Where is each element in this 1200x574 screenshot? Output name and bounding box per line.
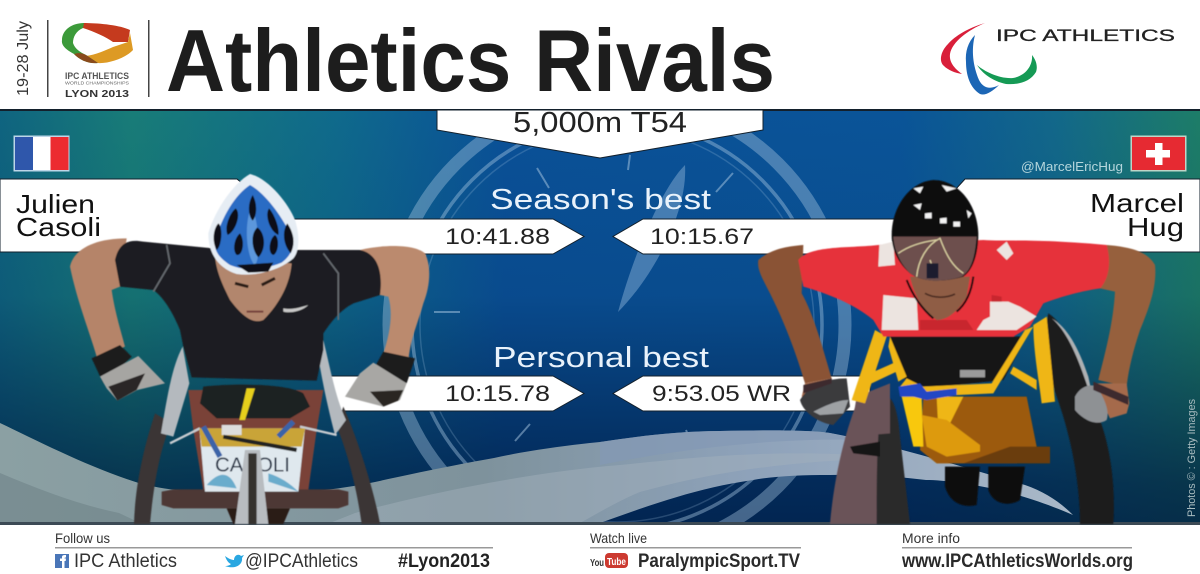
chair body: [920, 397, 1037, 463]
Switzerland flag: [1130, 136, 1186, 172]
athlete: Julien Casoli: [70, 174, 429, 524]
axle: [162, 489, 348, 508]
name panel: Hug: Marcel: [1090, 188, 1184, 218]
face: [215, 257, 292, 321]
arms: [70, 238, 127, 357]
photo credit: Photos © : Getty Images: [1186, 399, 1198, 517]
time bar: Hug season: [613, 219, 905, 254]
time bar: Casoli personal: [330, 376, 584, 411]
time bar: Casoli season: 10:41.88: [445, 224, 550, 249]
footer: follow us: #Lyon2013: [398, 551, 490, 572]
time bar: Hug personal: 9:53.05 WR: [652, 381, 791, 406]
name panel: Casoli: Julien: [16, 189, 95, 219]
name panel: Casoli: [0, 179, 243, 252]
shirt: [115, 241, 381, 381]
season heading: Season's best: [490, 184, 711, 216]
time bar: Hug personal: [613, 376, 870, 411]
athlete: Marcel Hug: [758, 180, 1155, 524]
IPC Athletics logo: IPC ATHLETICS: [996, 27, 1175, 45]
footer white strip: [0, 525, 1200, 574]
divider right: [148, 20, 150, 97]
time bar: Casoli personal: 10:15.78: [445, 381, 550, 406]
divider left: [47, 20, 48, 97]
header white strip: [0, 0, 1200, 110]
helmet: [892, 180, 978, 281]
seat: [890, 337, 1027, 388]
feet: [945, 467, 1025, 506]
footer: watch live: ParalympicSport.TV: [638, 551, 800, 572]
gloves: [92, 345, 415, 383]
wheels: [1046, 313, 1114, 524]
icon: YouTube: You: [590, 558, 604, 569]
footer: follow us: IPC Athletics: [74, 551, 177, 572]
Lyon 2013 logo: [62, 23, 133, 100]
Lyon 2013 logo: WORLD CHAMPIONSHIPS: [65, 80, 129, 86]
time bar: Casoli season: [290, 219, 584, 254]
bottom rule: [0, 522, 1200, 525]
swoosh: [0, 423, 1073, 523]
gloves: [800, 378, 850, 425]
front fork: [235, 450, 268, 524]
name panel: Casoli: Casoli: [16, 212, 101, 242]
icon: facebook: [55, 554, 69, 568]
helmet: [208, 174, 298, 275]
event tab: [437, 107, 763, 158]
date: 19-28 July: [15, 21, 32, 96]
footer: more info: www.IPCAthleticsWorlds.org: [901, 551, 1133, 572]
pouch: [200, 385, 310, 418]
time bar: Hug season: 10:15.67: [650, 224, 754, 249]
personal heading: Personal best: [493, 342, 709, 374]
Twitter handle: @MarcelEricHug: [1021, 159, 1123, 174]
wheels: [134, 407, 380, 524]
title: Athletics Rivals: [166, 11, 775, 110]
face: [910, 277, 970, 320]
Lyon 2013 logo: LYON 2013: [65, 88, 129, 100]
red jersey: [798, 240, 1109, 337]
name panel: Hug: Hug: [1127, 212, 1184, 242]
race bib: [199, 428, 305, 492]
athlete: Julien Casoli: CASOLI: [215, 455, 290, 477]
blue banner background: [0, 110, 1200, 524]
icon: twitter bird: [225, 555, 244, 567]
footer: more info: [901, 530, 1133, 572]
icon: YouTube: [590, 553, 628, 569]
top rule: [0, 109, 1200, 111]
footer: follow us: @IPCAthletics: [245, 551, 358, 572]
footer: follow us: [55, 530, 493, 572]
footer: more info: More info: [902, 530, 960, 546]
France flag: [14, 136, 70, 172]
event tab: 5,000m T54: [513, 107, 687, 139]
footer: watch live: Watch live: [590, 530, 647, 546]
footer: watch live: [590, 530, 801, 572]
icon: YouTube: Tube: [607, 557, 626, 568]
name panel: Hug: [955, 179, 1200, 252]
frame: [188, 390, 323, 490]
yellow frame: [852, 317, 1055, 403]
Lyon 2013 logo: IPC ATHLETICS: [65, 71, 129, 81]
IPC Athletics logo: [941, 23, 1175, 95]
stopwatch graphic: [382, 132, 852, 522]
footer: follow us: Follow us: [55, 530, 110, 546]
arms: [758, 245, 832, 383]
